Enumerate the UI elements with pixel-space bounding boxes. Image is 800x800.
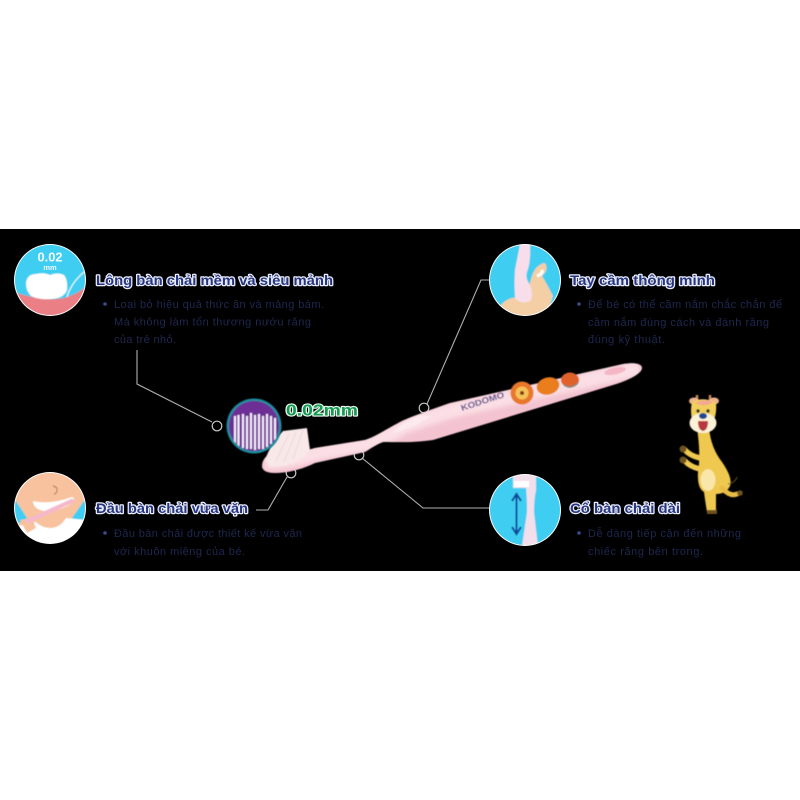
bullet text: soft bristles: của trẻ nhỏ.	[114, 334, 176, 346]
magnified bristles circle	[226, 398, 282, 454]
head	[691, 399, 716, 420]
icon: tooth with 0.02 mm: mm	[43, 263, 57, 272]
bullet text: soft bristles: Loại bỏ hiệu quả thức ăn và mảng bám.	[114, 299, 324, 311]
bullet text: soft bristles	[103, 299, 324, 346]
leg and tail	[722, 488, 737, 495]
horns and ears	[697, 395, 710, 405]
leader line: neck	[354, 450, 490, 508]
bullet text: fitted head: Đầu bàn chải được thiết kế vừa vặn	[114, 528, 302, 540]
heading: smart handle: Tay cầm thông minh	[570, 272, 715, 288]
label: 0.02mm: 0.02mm	[286, 402, 358, 420]
giraffe mascot	[680, 395, 743, 514]
heading: fitted head: Đầu bàn chải vừa vặn	[96, 500, 248, 516]
sticker: lion	[510, 382, 534, 404]
bristle tufts	[276, 430, 303, 462]
bullet text: long neck: Dễ dàng tiếp cận đến những	[588, 527, 741, 540]
handle grip hole	[604, 365, 626, 377]
leader line: head	[256, 468, 296, 510]
body highlight	[265, 368, 640, 462]
sticker: tomato	[561, 372, 579, 388]
heading: long neck: Cổ bàn chải dài	[570, 500, 680, 516]
belly	[700, 469, 716, 491]
panel: smart handle	[489, 244, 782, 346]
panel: soft bristles	[14, 244, 333, 346]
icon: child mouth with toothbrush	[14, 472, 86, 544]
bullet text: fitted head	[103, 528, 302, 558]
bullet text: smart handle	[577, 298, 782, 346]
black background band	[0, 229, 800, 571]
leader line: handle	[419, 280, 490, 413]
bullet text: long neck	[577, 527, 741, 558]
heading: soft bristles: Lông bàn chải mềm và siêu mảnh	[96, 272, 333, 288]
icon: tooth with 0.02 mm	[14, 244, 86, 316]
bullet text: soft bristles: Mà không làm tổn thương nướu răng	[114, 316, 311, 328]
muzzle	[690, 413, 716, 433]
icon: hand gripping handle	[489, 244, 561, 316]
arms	[684, 449, 700, 469]
bullet text: long neck: chiếc răng bên trong.	[588, 546, 703, 558]
icon: tooth with 0.02 mm: 0.02	[38, 250, 63, 264]
sticker: orange fruit	[535, 375, 561, 397]
panel: fitted head	[14, 472, 302, 558]
handle grip	[392, 415, 432, 433]
brush body	[262, 363, 642, 473]
neck and body	[697, 428, 731, 512]
brand name: KODOMO	[460, 389, 506, 413]
panel: long neck	[489, 474, 741, 558]
bullet text: smart handle: Để bé có thể cầm nắm chắc chắn để	[588, 298, 782, 311]
bristles	[265, 428, 310, 466]
bullet text: fitted head: với khuôn miệng của bé.	[114, 546, 245, 558]
bullet text: smart handle: cầm nắm đúng cách và đánh răng	[588, 316, 769, 329]
leader line: bristles	[137, 350, 222, 431]
toothbrush	[262, 363, 642, 473]
bullet text: smart handle: đúng kỹ thuật.	[588, 334, 665, 346]
icon: long neck with arrow	[489, 474, 561, 546]
